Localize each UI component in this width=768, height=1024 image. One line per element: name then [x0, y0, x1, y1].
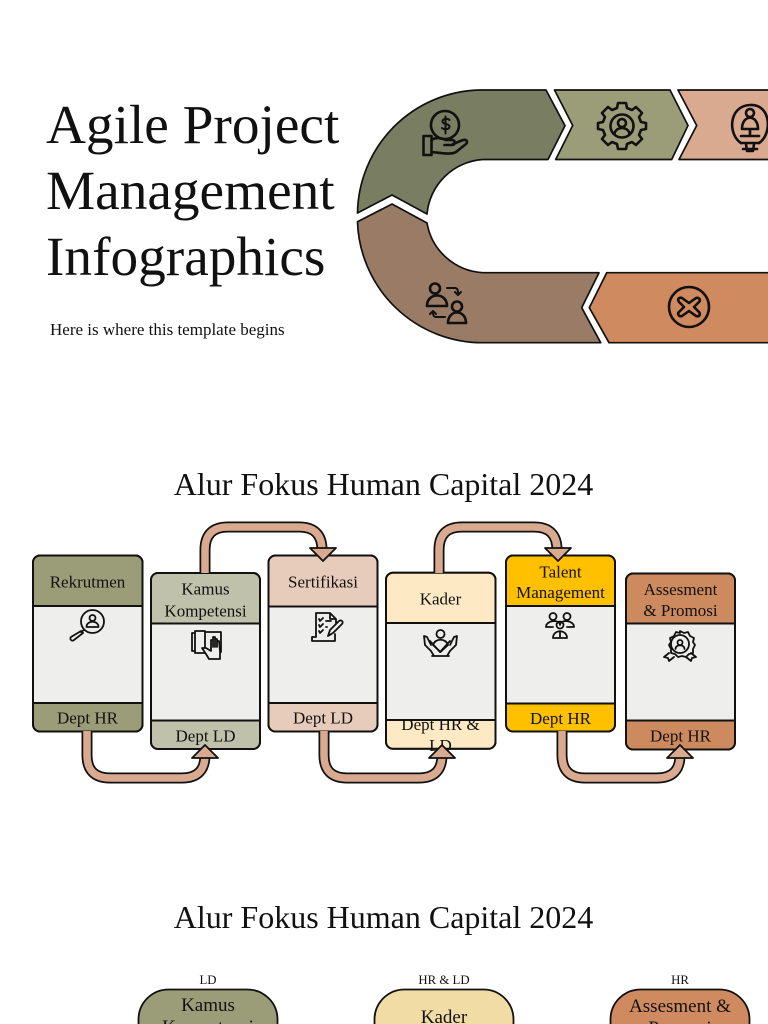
U-shaped process diagram	[358, 90, 768, 343]
pill: Assesment & Promosi	[610, 973, 750, 1024]
card: Rekrutmen: Dept HR	[57, 708, 119, 728]
card: Sertifikasi: Dept LD	[293, 708, 353, 728]
arrow: Kader to Talent	[439, 527, 571, 573]
arrow: Rekrutmen to Kamus	[87, 731, 218, 778]
icon: book and hand	[192, 631, 221, 659]
segment: peach chevron	[678, 90, 768, 160]
card: Talent Management: Talent	[539, 562, 582, 582]
pill: Kamus Kompetensi: Kamus	[181, 995, 235, 1016]
icon: document checklist	[312, 613, 343, 641]
subtitle: Here is where this template begins	[50, 320, 285, 339]
arrow: Talent to Assesment	[562, 731, 693, 778]
heading: section 2: Alur Fokus Human Capital 2024	[174, 899, 593, 935]
icon: light bulb with person	[732, 105, 768, 151]
card: Kader: Kader	[420, 590, 462, 608]
title: Infographics	[46, 226, 325, 287]
icon: search person	[70, 610, 104, 641]
pill: Kader	[374, 973, 514, 1024]
card: Rekrutmen	[33, 556, 142, 732]
icon: hand with coin	[424, 111, 467, 155]
card: Kader: LD	[429, 736, 452, 755]
card: Sertifikasi	[268, 556, 378, 732]
card: Kader: Dept HR &	[401, 715, 480, 734]
title: Management	[46, 160, 335, 221]
icon: hands holding person	[424, 630, 457, 656]
icon: gear with person	[598, 103, 646, 149]
arrow: Kamus to Sertifikasi	[205, 527, 336, 573]
heading: section 1: Alur Fokus Human Capital 2024	[174, 466, 593, 502]
pill: Assesment & Promosi: Assesment &	[629, 996, 731, 1017]
card: Kamus Kompetensi: Dept LD	[176, 726, 235, 746]
icon: award badge	[664, 631, 696, 661]
pill: Kamus Kompetensi: LD	[199, 973, 217, 987]
flow diagram	[33, 527, 735, 778]
title	[46, 94, 340, 287]
card: Assesment & Promosi: Dept HR	[650, 726, 712, 746]
card: Assesment & Promosi: Assesment	[644, 580, 718, 599]
icon: people swap	[427, 284, 466, 323]
title: Agile Project	[46, 94, 340, 155]
card: Kamus Kompetensi: Kompetensi	[164, 602, 247, 620]
card: Rekrutmen: Rekrutmen	[50, 572, 126, 592]
pill: Assesment & Promosi: HR	[671, 973, 689, 987]
arrow: Sertifikasi to Kader	[324, 731, 455, 778]
card: Sertifikasi: Sertifikasi	[288, 572, 358, 592]
icon: team of three	[546, 613, 574, 638]
segment: dark olive curve	[358, 90, 565, 214]
icon: circled cross	[669, 287, 709, 327]
segment: brown curve	[358, 204, 601, 343]
pill: Kader: HR & LD	[418, 973, 470, 987]
card: Kamus Kompetensi	[151, 573, 260, 749]
pill: Kamus Kompetensi	[138, 973, 278, 1024]
card: Assesment & Promosi: & Promosi	[643, 601, 718, 620]
segment: orange chevron	[589, 273, 768, 343]
card: Talent Management	[506, 556, 615, 732]
card: Kader	[386, 573, 496, 755]
card: Talent Management: Management	[516, 583, 605, 602]
segment: olive chevron	[554, 90, 688, 160]
card: Talent Management: Dept HR	[530, 709, 592, 728]
card: Kamus Kompetensi: Kamus	[181, 580, 230, 598]
card: Assesment & Promosi	[626, 574, 735, 750]
